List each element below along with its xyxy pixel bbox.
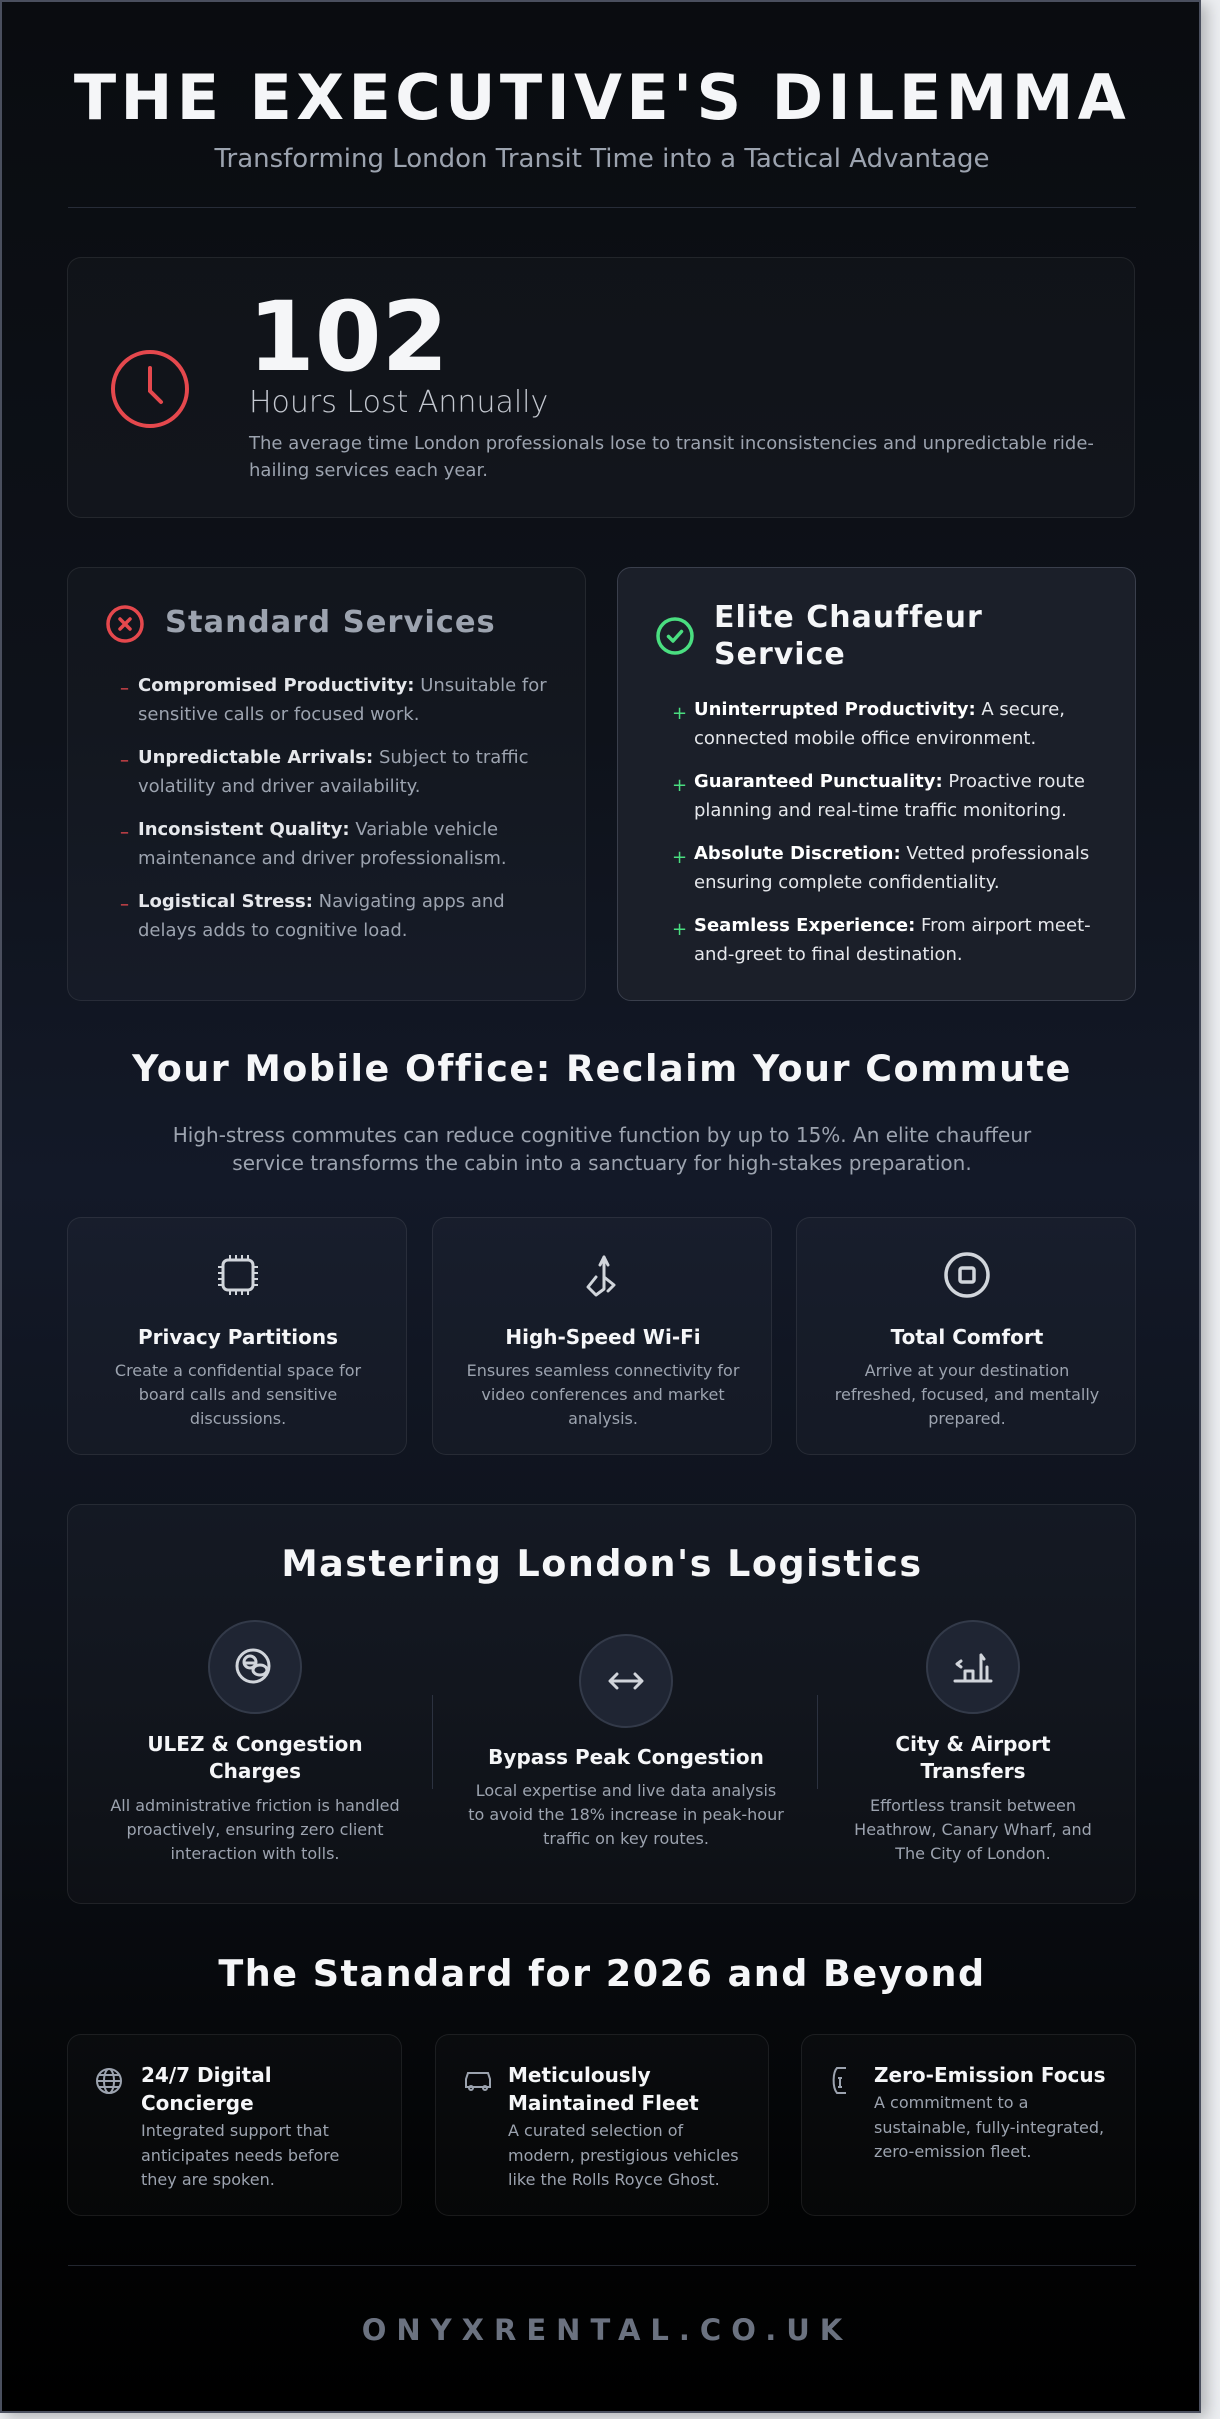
- text: All administrative friction is handled: [110, 1796, 400, 1815]
- panel: elite chauffeur service: +: [672, 775, 687, 796]
- panel: total comfort: [796, 1217, 1136, 1455]
- icon: check circle: [656, 617, 694, 655]
- text: proactively, ensuring zero client: [126, 1820, 384, 1839]
- title: Zero-Emission Focus: [874, 2063, 1106, 2087]
- list: drawbacks: volatility and driver availability.: [138, 776, 420, 797]
- icon: city: [926, 1620, 1020, 1714]
- title: [508, 2063, 699, 2115]
- stat number: 102: [248, 281, 448, 393]
- title: Maintained Fleet: [508, 2091, 699, 2115]
- heading: standard 2026: The Standard for 2026 and Beyond: [218, 1952, 986, 1995]
- icon: circle square: [944, 1252, 990, 1298]
- panel: elite chauffeur service: [617, 567, 1136, 1001]
- icon: double arrow: [579, 1634, 673, 1728]
- list: drawbacks: delays adds to cognitive load.: [138, 920, 408, 941]
- text: Effortless transit between: [870, 1796, 1076, 1815]
- list: benefits: Guaranteed Punctuality: Proactive route: [694, 771, 1085, 792]
- title: Bypass Peak Congestion: [488, 1745, 764, 1769]
- title: [895, 1732, 1051, 1783]
- panel: elite chauffeur service: +: [672, 919, 687, 940]
- title: ULEZ & Congestion: [147, 1732, 363, 1756]
- list: drawbacks: maintenance and driver professionalism.: [138, 848, 507, 869]
- text: mobile office intro: [173, 1123, 1032, 1175]
- stat label: Hours Lost Annually: [249, 385, 548, 420]
- item: bypass: [468, 1634, 784, 1848]
- feature text: prepared.: [928, 1409, 1006, 1428]
- text: A curated selection of: [508, 2121, 683, 2140]
- text: they are spoken.: [141, 2170, 275, 2189]
- item: ULEZ: [110, 1620, 400, 1863]
- feature text: discussions.: [190, 1409, 286, 1428]
- text: sustainable, fully-integrated,: [874, 2118, 1104, 2136]
- list: benefits: and-greet to final destination.: [694, 944, 963, 965]
- text: mobile office intro: High-stress commutes can reduce cognitive function by up to 15%. An elite chauffeur: [173, 1123, 1031, 1147]
- heading: Mastering London's Logistics: [281, 1542, 923, 1585]
- list: benefits: Seamless Experience: From airport meet-: [694, 915, 1091, 936]
- list: benefits: [672, 699, 1091, 965]
- heading: [714, 600, 983, 672]
- list: drawbacks: Compromised Productivity: Unsuitable for: [138, 675, 547, 696]
- feature text: analysis.: [568, 1409, 638, 1428]
- text: Heathrow, Canary Wharf, and: [854, 1820, 1092, 1839]
- icon: clock: [111, 350, 189, 428]
- panel: elite chauffeur service: +: [672, 847, 687, 868]
- panel: zero emission: [801, 2034, 1136, 2216]
- panel: fleet: [435, 2034, 769, 2216]
- feature text: [467, 1361, 740, 1428]
- footer: website: ONYXRENTAL.CO.UK: [362, 2313, 852, 2347]
- list: drawbacks: sensitive calls or focused work.: [138, 704, 419, 725]
- list: benefits: ensuring complete confidentiality.: [694, 872, 1000, 893]
- feature text: Create a confidential space for: [115, 1361, 361, 1380]
- panel: digital concierge: [67, 2034, 402, 2216]
- feature title: High-Speed Wi-Fi: [505, 1325, 701, 1349]
- text: The City of London.: [895, 1844, 1051, 1863]
- panel: privacy partitions: [67, 1217, 407, 1455]
- title: 24/7 Digital: [141, 2063, 272, 2087]
- feature text: board calls and sensitive: [139, 1385, 337, 1404]
- feature text: Arrive at your destination: [865, 1361, 1069, 1380]
- heading: mobile office: Your Mobile Office: Reclaim Your Commute: [132, 1047, 1072, 1090]
- icon: globe: [96, 2068, 122, 2094]
- panel: logistics: [67, 1504, 1136, 1904]
- text: zero-emission fleet.: [874, 2142, 1031, 2161]
- icon: x circle: [106, 605, 144, 643]
- panel: standard services: –: [120, 822, 129, 843]
- list: benefits: connected mobile office environment.: [694, 728, 1036, 749]
- text: [468, 1781, 784, 1848]
- stat description: [248, 433, 1094, 481]
- heading: Elite Chauffeur: [714, 600, 983, 635]
- feature text: refreshed, focused, and mentally: [835, 1385, 1099, 1404]
- list: drawbacks: [120, 675, 547, 941]
- heading: Standard Services: [165, 605, 496, 640]
- text: anticipates needs before: [141, 2146, 339, 2164]
- text: traffic on key routes.: [543, 1829, 709, 1848]
- text: mobile office intro: service transforms the cabin into a sanctuary for high-stakes preparation.: [232, 1151, 972, 1175]
- list: drawbacks: Logistical Stress: Navigating apps and: [138, 891, 505, 912]
- feature text: Ensures seamless connectivity for: [467, 1361, 739, 1380]
- stat description: The average time London professionals lose to transit inconsistencies and unpredictable ride-: [249, 433, 1094, 454]
- feature text: video conferences and market: [481, 1385, 725, 1404]
- text: interaction with tolls.: [170, 1844, 340, 1863]
- title: [147, 1732, 363, 1783]
- text: [874, 2093, 1104, 2161]
- text: [141, 2121, 339, 2189]
- title: [141, 2063, 272, 2115]
- icon: charger: [832, 2067, 846, 2094]
- item: transfers: [854, 1620, 1092, 1863]
- text: like the Rolls Royce Ghost.: [508, 2170, 720, 2189]
- list: benefits: planning and real-time traffic monitoring.: [694, 800, 1067, 821]
- text: Integrated support that: [141, 2121, 329, 2140]
- title: City & Airport: [895, 1732, 1051, 1756]
- text: [854, 1796, 1092, 1863]
- list: benefits: Absolute Discretion: Vetted professionals: [694, 843, 1089, 864]
- icon: ulez: [208, 1620, 302, 1714]
- text: [508, 2121, 739, 2189]
- title: THE EXECUTIVE'S DILEMMA: [74, 61, 1130, 134]
- text: to avoid the 18% increase in peak-hour: [468, 1805, 784, 1824]
- list: benefits: Uninterrupted Productivity: A secure,: [694, 699, 1065, 720]
- panel: stat 102 hours: [67, 257, 1135, 518]
- feature title: Total Comfort: [891, 1325, 1043, 1349]
- icon: chip: [218, 1255, 258, 1295]
- subtitle: Transforming London Transit Time into a Tactical Advantage: [214, 144, 990, 174]
- panel: standard services: –: [120, 894, 129, 915]
- text: Local expertise and live data analysis: [476, 1781, 776, 1800]
- heading: Service: [714, 637, 846, 672]
- title: Transfers: [920, 1759, 1025, 1783]
- list: drawbacks: Inconsistent Quality: Variable vehicle: [138, 819, 498, 840]
- list: drawbacks: Unpredictable Arrivals: Subject to traffic: [138, 747, 529, 768]
- panel: wifi: [432, 1217, 772, 1455]
- title: Concierge: [141, 2091, 254, 2115]
- panel: standard services: –: [120, 750, 129, 771]
- title: Charges: [209, 1759, 301, 1783]
- title: Meticulously: [508, 2063, 651, 2087]
- feature text: [115, 1361, 362, 1428]
- panel: standard services: –: [120, 678, 129, 699]
- panel: elite chauffeur service: +: [672, 703, 687, 724]
- feature title: Privacy Partitions: [138, 1325, 338, 1349]
- text: [110, 1796, 400, 1863]
- stat description: hailing services each year.: [249, 460, 488, 481]
- text: modern, prestigious vehicles: [508, 2146, 739, 2164]
- panel: standard services: [67, 567, 586, 1001]
- feature text: [835, 1361, 1099, 1428]
- text: A commitment to a: [874, 2093, 1028, 2112]
- icon: car: [465, 2072, 491, 2091]
- icon: signal: [586, 1255, 616, 1296]
